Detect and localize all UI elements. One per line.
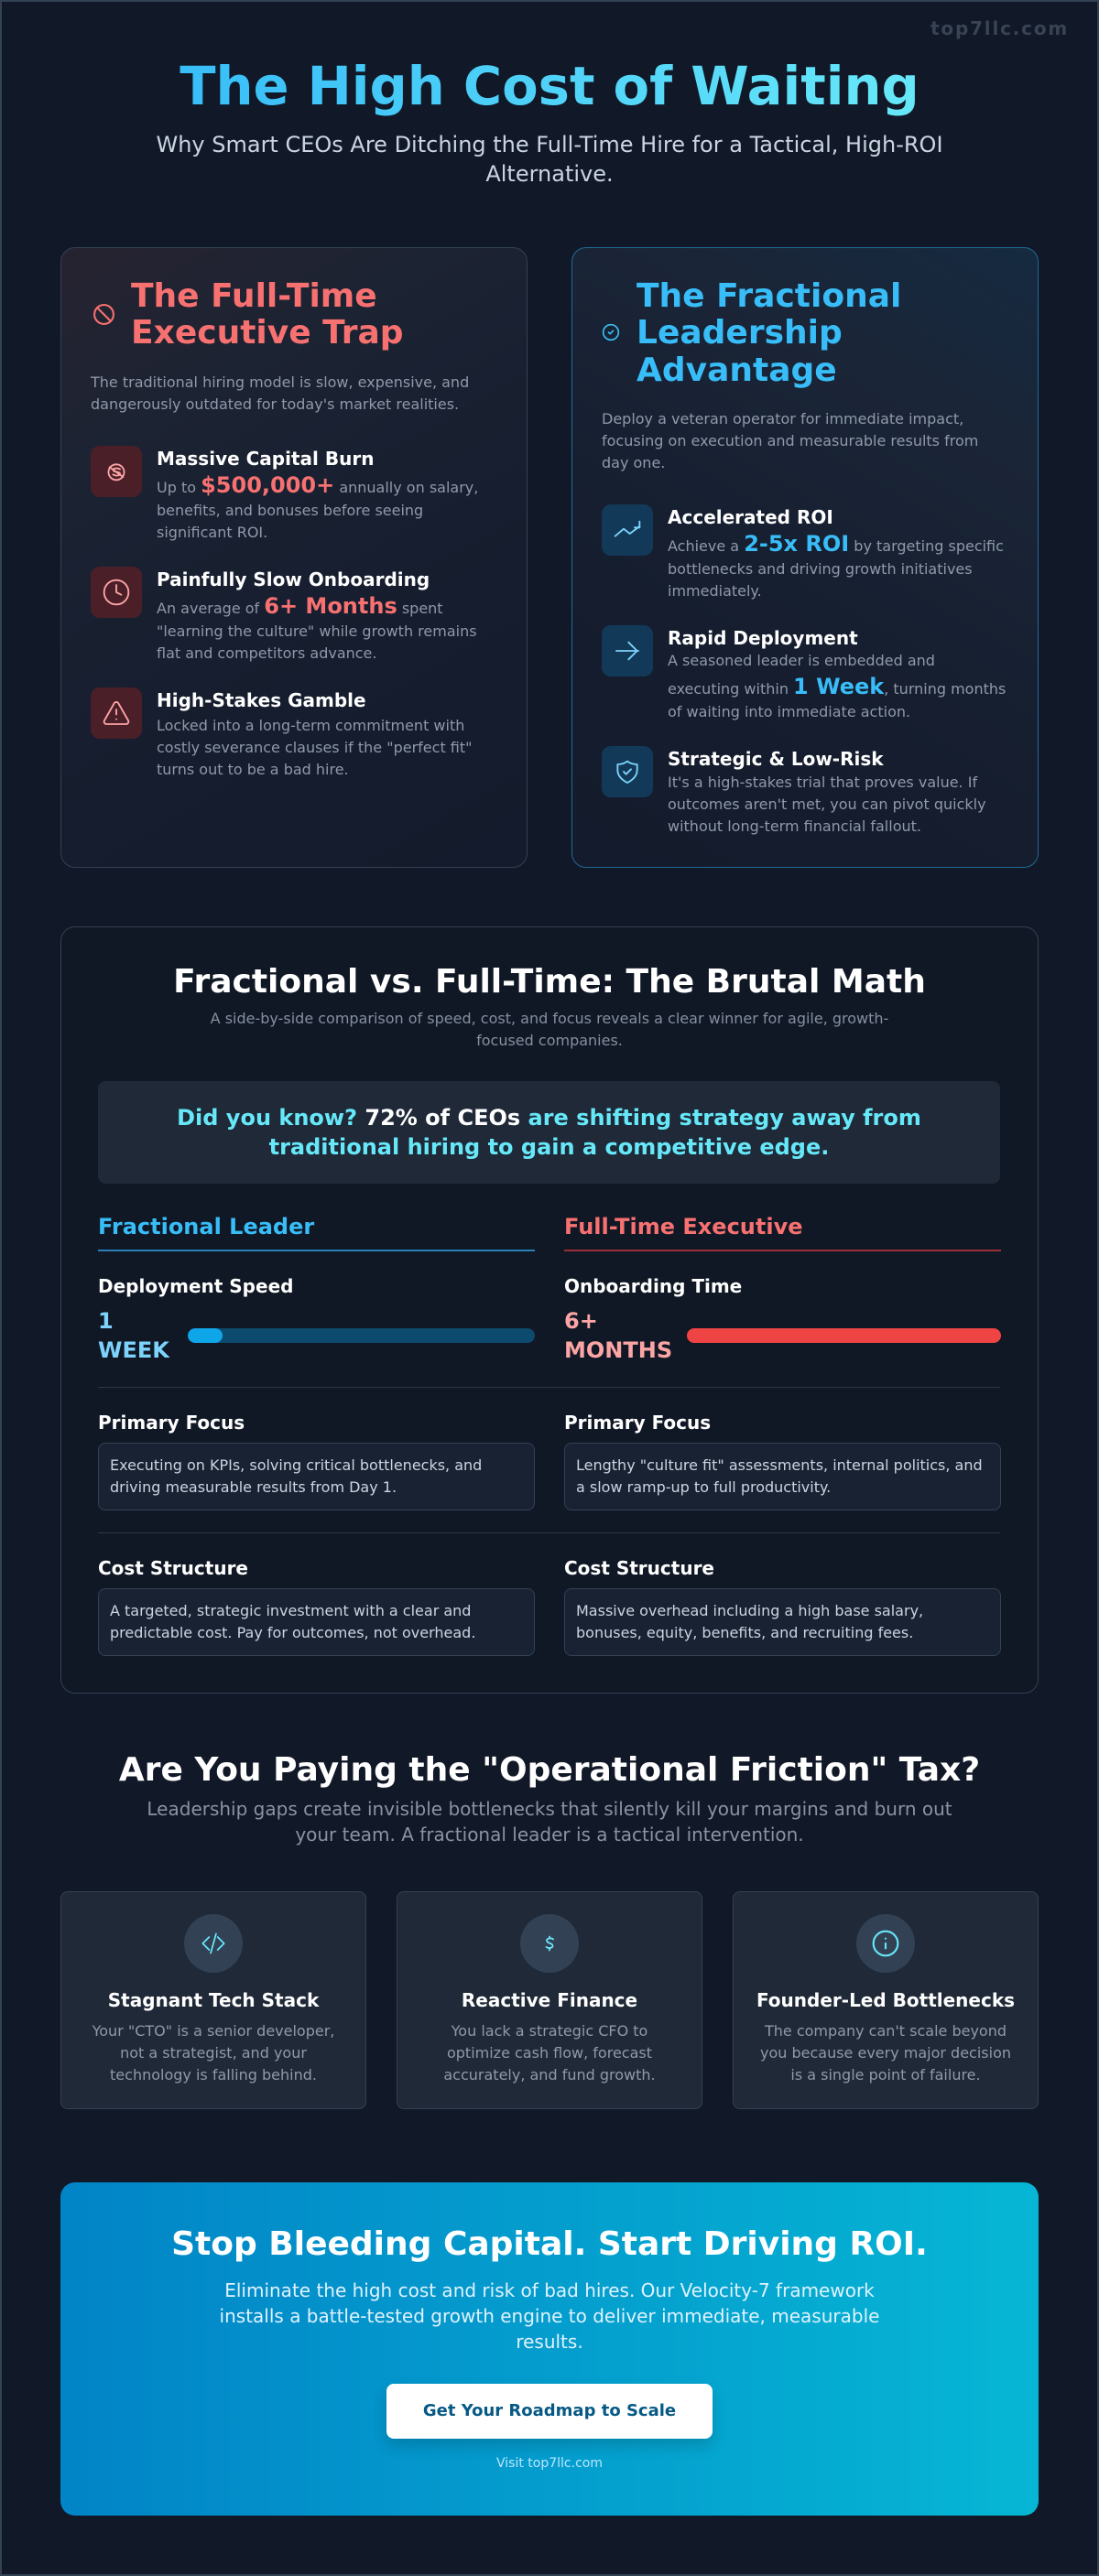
box: fractional focus: Executing on KPIs, solving critical bottlenecks, and	[110, 1456, 482, 1474]
heading: full-time trap: The Full-Time	[131, 277, 377, 315]
item text: It's a high-stakes trial that proves value. If	[668, 774, 977, 791]
heading: fractional advantage: Leadership	[637, 314, 843, 352]
intro text: The traditional hiring model is slow, expensive, and	[91, 373, 469, 391]
cta text: results.	[516, 2331, 583, 2353]
comparison subtitle: A side-by-side comparison of speed, cost, and focus reveals a clear winner for agile, growth-	[211, 1010, 888, 1027]
item text: without long-term financial fallout.	[668, 817, 921, 835]
box: full-time focus: a slow ramp-up to full productivity.	[576, 1478, 831, 1496]
item text: An average of 6+ Months spent	[157, 593, 443, 619]
box: fractional cost: predictable cost. Pay for outcomes, not overhead.	[110, 1624, 475, 1641]
item text: A seasoned leader is embedded and	[668, 652, 935, 669]
card text: you because every major decision	[760, 2044, 1011, 2062]
cta text	[220, 2279, 879, 2353]
card text	[92, 2022, 334, 2084]
icon: arrow right	[602, 625, 653, 676]
item text	[157, 472, 478, 541]
visit link: Visit top7llc.com	[496, 2456, 603, 2471]
intro text	[602, 410, 978, 471]
comparison subtitle: focused companies.	[476, 1032, 623, 1049]
box: full-time cost: Massive overhead including a high base salary,	[576, 1602, 923, 1619]
subtitle	[156, 132, 943, 187]
cta heading: Stop Bleeding Capital. Start Driving ROI.	[171, 2225, 928, 2263]
title: The High Cost of Waiting	[180, 56, 919, 117]
heading: fractional advantage: The Fractional	[637, 277, 901, 315]
column heading: full-time executive: Full-Time Executive	[564, 1214, 802, 1239]
panel: full-time executive trap	[60, 247, 528, 868]
intro text: day one.	[602, 454, 665, 471]
comparison subtitle	[211, 1010, 888, 1049]
label: primary focus full-time: Primary Focus	[564, 1412, 711, 1434]
box: fractional focus: driving measurable results from Day 1.	[110, 1478, 397, 1496]
card text: Your "CTO" is a senior developer,	[92, 2022, 334, 2040]
item text: flat and competitors advance.	[157, 644, 376, 662]
label: onboarding time: Onboarding Time	[564, 1275, 742, 1297]
icon: code	[184, 1914, 243, 1973]
card heading: Reactive Finance	[462, 1989, 637, 2011]
item text	[668, 774, 986, 835]
item heading: Accelerated ROI	[668, 506, 833, 528]
item: low risk	[602, 746, 986, 835]
stat: 6+ months: MONTHS	[564, 1337, 672, 1363]
card text	[443, 2022, 656, 2084]
box: full-time focus: Lengthy "culture fit" assessments, internal politics, and	[576, 1456, 983, 1474]
card text: optimize cash flow, forecast	[447, 2044, 652, 2062]
heading: fractional advantage	[637, 277, 901, 388]
item text: "learning the culture" while growth remains	[157, 622, 477, 640]
box: full-time focus	[564, 1443, 1001, 1510]
icon: dollar	[520, 1914, 579, 1973]
heading: fractional advantage: Advantage	[637, 352, 837, 388]
item text: Locked into a long-term commitment with	[157, 717, 464, 734]
button: Get Your Roadmap to Scale	[423, 2401, 676, 2420]
item: gamble	[91, 687, 473, 778]
stat: 1 week: 1	[98, 1308, 114, 1334]
card text: technology is falling behind.	[110, 2066, 317, 2084]
card heading: Stagnant Tech Stack	[108, 1989, 319, 2011]
item text	[157, 593, 477, 662]
card: founder bottlenecks	[733, 1891, 1039, 2109]
bar fill	[188, 1328, 223, 1343]
card heading: Founder-Led Bottlenecks	[756, 1989, 1015, 2011]
button	[386, 2384, 713, 2439]
box: fractional focus	[98, 1443, 535, 1510]
icon: warning	[91, 687, 142, 739]
icon: shield check	[602, 746, 653, 797]
panel: brutal math comparison	[60, 926, 1039, 1694]
box: fractional cost: A targeted, strategic investment with a clear and	[110, 1602, 471, 1619]
card text: not a strategist, and your	[120, 2044, 307, 2062]
item text: Achieve a 2-5x ROI by targeting specific	[668, 531, 1004, 557]
item heading: Rapid Deployment	[668, 627, 858, 649]
heading: full-time trap: Executive Trap	[131, 314, 404, 352]
intro text	[90, 373, 469, 413]
item text: costly severance clauses if the "perfect fit"	[157, 739, 473, 756]
item: slow onboarding	[91, 567, 477, 662]
item heading: Painfully Slow Onboarding	[157, 568, 430, 590]
item text	[157, 717, 473, 778]
label: cost structure fractional: Cost Structure	[98, 1557, 248, 1579]
column heading: full-time executive	[564, 1210, 1001, 1251]
box: full-time cost: bonuses, equity, benefits, and recruiting fees.	[576, 1624, 913, 1641]
card text	[760, 2022, 1011, 2084]
friction subtitle: Leadership gaps create invisible bottlenecks that silently kill your margins and burn out	[147, 1798, 952, 1820]
intro text: Deploy a veteran operator for immediate impact,	[602, 410, 963, 428]
item text: benefits, and bonuses before seeing	[157, 502, 423, 519]
card text: The company can't scale beyond	[765, 2022, 1007, 2040]
subtitle: Why Smart CEOs Are Ditching the Full-Time Hire for a Tactical, High-ROI	[156, 132, 943, 157]
stat: 6+ months: 6+	[564, 1308, 598, 1334]
column heading: fractional leader: Fractional Leader	[98, 1214, 314, 1239]
item text	[668, 652, 1006, 720]
heading: full-time trap	[131, 277, 404, 352]
label: cost structure full-time: Cost Structure	[564, 1557, 714, 1579]
icon: info	[856, 1914, 915, 1973]
item text: immediately.	[668, 582, 762, 600]
label: deployment speed: Deployment Speed	[98, 1275, 293, 1297]
item text: turns out to be a bad hire.	[157, 761, 349, 778]
box: full-time cost	[564, 1588, 1001, 1656]
callout: did you know: Did you know? 72% of CEOs are shifting strategy away from	[177, 1105, 921, 1131]
item text: significant ROI.	[157, 524, 267, 541]
watermark: top7llc.com	[930, 17, 1069, 39]
card text: is a single point of failure.	[790, 2066, 981, 2084]
stat: 1 week	[98, 1308, 170, 1363]
card: reactive finance	[397, 1891, 702, 2109]
bar: full-time onboarding	[687, 1328, 1001, 1343]
callout: did you know	[98, 1081, 1000, 1184]
icon: burn	[91, 446, 142, 497]
item heading: High-Stakes Gamble	[157, 689, 366, 711]
icon: ban	[93, 304, 114, 325]
box: fractional cost	[98, 1588, 535, 1656]
heading: operational friction: Are You Paying the "Operational Friction" Tax?	[119, 1751, 980, 1789]
item heading: Strategic & Low-Risk	[668, 748, 884, 770]
callout: did you know: traditional hiring to gain a competitive edge.	[269, 1134, 829, 1160]
intro text: dangerously outdated for today's market realities.	[91, 395, 459, 413]
item: accelerated roi	[602, 504, 1004, 600]
label: primary focus fractional: Primary Focus	[98, 1412, 245, 1434]
item text: outcomes aren't met, you can pivot quickly	[668, 796, 986, 813]
intro text: focusing on execution and measurable results from	[602, 432, 978, 449]
icon: check circle	[603, 324, 619, 341]
stat: 6+ months	[564, 1308, 672, 1363]
friction subtitle: your team. A fractional leader is a tactical intervention.	[295, 1824, 804, 1845]
cta text: Eliminate the high cost and risk of bad hires. Our Velocity-7 framework	[224, 2279, 875, 2301]
bar: fractional deployment	[188, 1328, 535, 1343]
card text: accurately, and fund growth.	[443, 2066, 656, 2084]
item text: Up to $500,000+ annually on salary,	[157, 472, 478, 498]
subtitle: Alternative.	[485, 161, 614, 187]
item heading: Massive Capital Burn	[157, 448, 374, 470]
card text: You lack a strategic CFO to	[452, 2022, 647, 2040]
panel: call to action	[60, 2182, 1039, 2516]
item text: executing within 1 Week, turning months	[668, 674, 1006, 699]
panel: fractional leadership advantage	[571, 247, 1039, 868]
heading: brutal math: Fractional vs. Full-Time: The Brutal Math	[173, 963, 926, 1001]
item: capital burn	[91, 446, 478, 541]
icon: clock	[91, 567, 142, 618]
icon: trending up	[602, 504, 653, 556]
card: tech stack	[60, 1891, 366, 2109]
cta text: installs a battle-tested growth engine to deliver immediate, measurable	[220, 2305, 879, 2327]
item: rapid deployment	[602, 625, 1006, 720]
friction subtitle	[147, 1798, 952, 1845]
stat: 1 week: WEEK	[98, 1337, 169, 1363]
item text: of waiting into immediate action.	[668, 703, 910, 720]
column heading: fractional leader	[98, 1210, 535, 1251]
item text: bottlenecks and driving growth initiatives	[668, 560, 973, 578]
item text	[668, 531, 1004, 600]
